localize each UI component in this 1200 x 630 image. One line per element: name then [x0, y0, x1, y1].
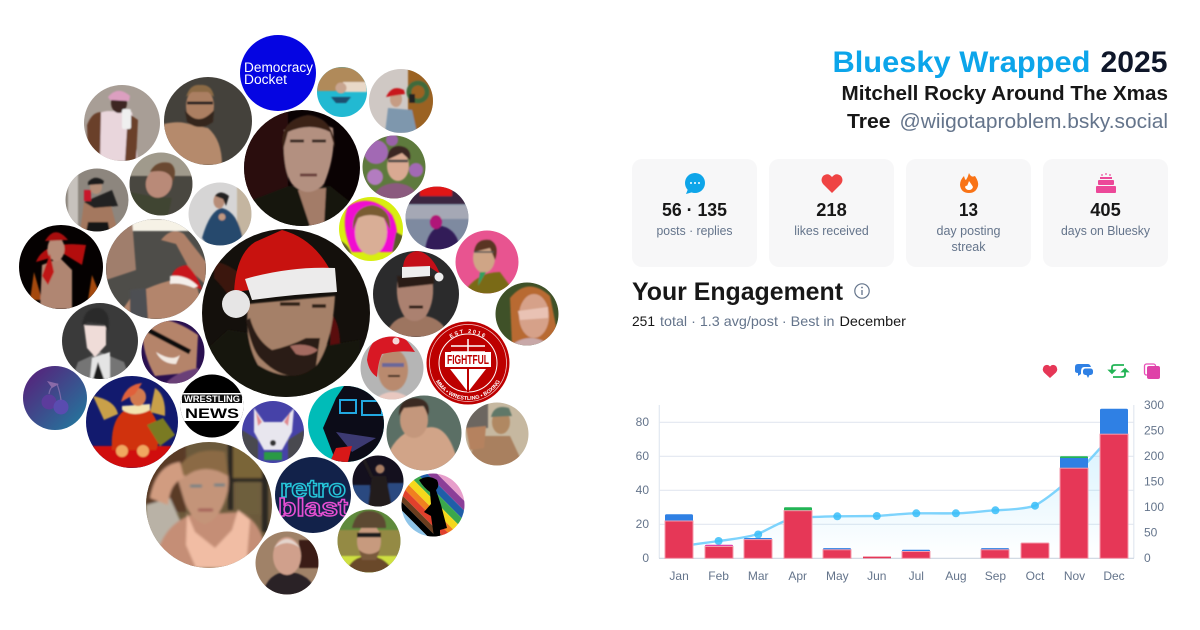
engagement summary line: December	[840, 313, 906, 329]
bars: January	[665, 514, 693, 558]
avatar: shirtless man with cap, mirror selfie	[465, 402, 529, 466]
avatar: Darth Vader with blue sunglasses	[308, 386, 384, 462]
avatar: smiling man with glasses, purple tint	[141, 319, 205, 384]
avatar: laughing man, pink background	[455, 230, 519, 294]
right axis labels: 200	[1144, 449, 1164, 463]
bars: April	[784, 507, 812, 558]
avatar: Wrestling News logo	[180, 374, 244, 438]
left axis labels: 0	[642, 551, 649, 565]
engagement summary line	[632, 313, 906, 329]
avatar: pixel art angel with gift	[86, 376, 178, 468]
avatar: Fightful logo: FIGHTFUL	[447, 352, 489, 367]
avatar: Wrestling News logo: WRESTLING	[184, 394, 240, 405]
bars: December	[1100, 409, 1128, 558]
month labels: Feb	[708, 569, 729, 583]
right axis labels: 300	[1144, 398, 1164, 412]
avatar: man with cap and round glasses	[337, 509, 401, 574]
right axis labels: 100	[1144, 500, 1164, 514]
bars: July	[902, 550, 930, 558]
month labels: May	[826, 569, 849, 583]
engagement summary line: 251	[632, 313, 655, 329]
avatar: illustrated man in suit	[62, 303, 138, 379]
avatar: pink bandana selfie	[84, 85, 160, 161]
avatar: man in red Mario cap	[360, 335, 424, 400]
avatar: flexing arm with santa hat	[106, 219, 206, 319]
avatar: Fightful logo: EST 2016	[449, 329, 486, 338]
left axis labels	[636, 415, 649, 565]
right axis labels: 250	[1144, 424, 1164, 438]
month labels: Jun	[867, 569, 886, 583]
avatar: Retro Blast logo: blast	[278, 494, 349, 522]
bars: May	[823, 548, 851, 558]
right axis labels: 150	[1144, 474, 1164, 488]
bars: September	[981, 548, 1009, 558]
combo chart: monthly engagement bars with cumulative line	[636, 398, 1164, 583]
avatar: man in santa hat with moustache	[373, 251, 459, 337]
avatar: fan at stadium	[405, 186, 469, 250]
right axis labels: 50	[1144, 526, 1158, 540]
cumulative area fill	[765, 451, 1100, 532]
avatar: Fightful logo: MMA • WRESTLING • BOXING	[436, 380, 500, 400]
right axis labels: 0	[1144, 551, 1151, 565]
avatar: Fightful logo	[426, 322, 510, 404]
icon: flame	[960, 173, 978, 193]
user display name and handle: Tree	[847, 111, 890, 133]
user display name and handle	[842, 83, 1168, 133]
right axis labels	[1144, 398, 1164, 565]
avatar: Retro Blast logo	[275, 457, 351, 533]
stat card: posts and replies	[632, 159, 757, 267]
stat card: days on Bluesky	[1043, 159, 1168, 267]
icon: birthday cake	[1096, 173, 1116, 193]
header: Bluesky Wrapped 2025: 2025	[1100, 46, 1168, 79]
stat card: day posting streak	[906, 159, 1031, 267]
engagement summary line: total · 1.3 avg/post · Best in	[660, 313, 834, 329]
line markers	[715, 502, 1039, 545]
month labels: Nov	[1064, 569, 1085, 583]
avatar: man reclining, green shirt	[129, 152, 193, 216]
stat card: likes received: likes received	[794, 224, 869, 238]
bars: June	[863, 557, 891, 558]
avatar: bearded man with glasses	[164, 77, 252, 165]
avatar: main profile, santa hat and beard	[202, 229, 370, 397]
left axis labels: 40	[636, 483, 649, 497]
avatar: Wrestling News logo: NEWS	[185, 405, 239, 421]
bars: March	[744, 538, 772, 558]
icon: legend reposts	[1110, 365, 1128, 377]
left axis labels: 80	[636, 415, 649, 429]
cumulative line	[679, 434, 1114, 547]
header: Bluesky Wrapped 2025: Bluesky Wrapped	[832, 46, 1090, 79]
icon: heart	[822, 174, 842, 193]
avatar: black cap mirror selfie	[65, 168, 129, 232]
avatar: Democracy Docket: Democracy	[244, 60, 313, 75]
avatar: cherries	[23, 366, 87, 430]
avatar: man in blue suit	[188, 182, 252, 246]
stacked bars	[665, 409, 1128, 558]
month labels: Mar	[748, 569, 769, 583]
icon: legend heart	[1043, 365, 1057, 378]
stat card: day posting streak: day posting	[936, 224, 1001, 238]
avatar: yellow and magenta swirl portrait	[339, 197, 403, 261]
chart legend icons	[1043, 364, 1160, 379]
stat card: likes received: 218	[816, 200, 847, 220]
avatar: swimming pool	[317, 67, 367, 117]
chart grid and axes	[659, 405, 1134, 558]
avatar: older bald man	[255, 531, 319, 595]
avatar: man with hand in hair, peach tank top	[146, 440, 272, 568]
icon: legend replies	[1075, 364, 1093, 378]
month labels: Oct	[1026, 569, 1045, 583]
avatar: red devil costume	[19, 225, 103, 309]
avatar: man in black suit on stage	[352, 455, 404, 507]
avatar: pride stripes silhouette	[402, 474, 464, 536]
month labels: Jan	[669, 569, 689, 583]
icon: legend quotes	[1144, 364, 1160, 379]
avatar: redhead with pink glasses	[495, 282, 560, 346]
avatar bubble cluster	[19, 35, 558, 594]
stat card: posts and replies: 56 · 135	[662, 200, 727, 220]
stat card: day posting streak: 13	[959, 200, 978, 220]
month labels: Sep	[985, 569, 1006, 583]
bars: October	[1021, 543, 1049, 558]
avatar: Democracy Docket	[240, 35, 316, 111]
stat card: day posting streak: streak	[952, 240, 986, 254]
avatar: pixel art wolf	[242, 401, 304, 463]
bars: February	[705, 545, 733, 558]
month labels	[669, 569, 1125, 583]
avatar: man among purple flowers	[362, 134, 426, 199]
icon: info	[855, 284, 869, 298]
stat card: days on Bluesky: days on Bluesky	[1061, 224, 1151, 238]
month labels: Jul	[909, 569, 924, 583]
stat card: posts and replies: posts · replies	[656, 224, 732, 238]
avatar: christmas mirror selfie	[369, 69, 434, 133]
left axis labels: 20	[636, 517, 649, 531]
avatar: Democracy Docket: Docket	[244, 72, 287, 87]
month labels: Aug	[945, 569, 967, 583]
month labels: Apr	[788, 569, 807, 583]
avatar: shirtless man in pool	[386, 395, 462, 471]
bars: November	[1060, 456, 1088, 558]
user display name and handle: Mitchell Rocky Around The Xmas	[842, 83, 1168, 105]
stat card: likes received	[769, 159, 894, 267]
avatar: dark-haired man in black jacket	[244, 110, 360, 226]
stat card: days on Bluesky: 405	[1090, 200, 1121, 220]
user display name and handle: @wiigotaproblem.bsky.social	[900, 111, 1168, 133]
avatar: Retro Blast logo: retro	[280, 475, 346, 503]
heading: Your Engagement: Your Engagement	[632, 278, 844, 306]
month labels: Dec	[1103, 569, 1125, 583]
icon: chat bubble	[685, 173, 705, 194]
left axis labels: 60	[636, 449, 649, 463]
